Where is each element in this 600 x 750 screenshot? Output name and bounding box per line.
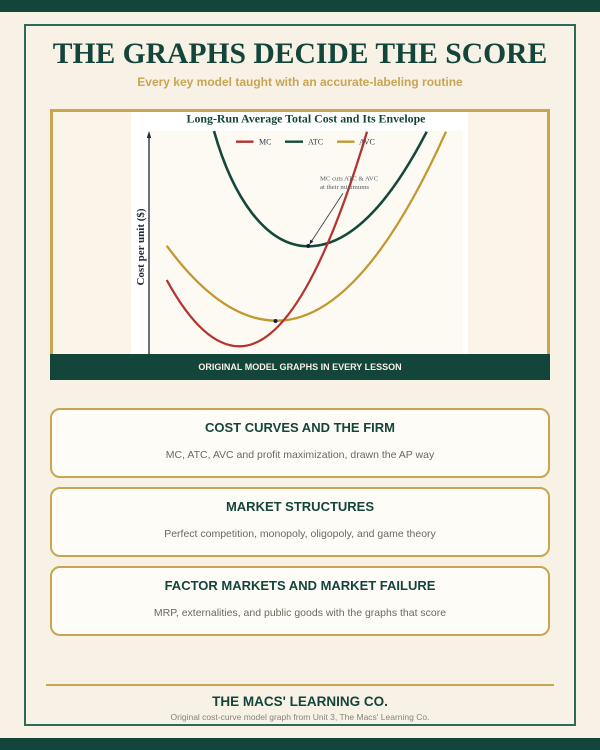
chart title: Long-Run Average Total Cost and Its Envelope <box>187 112 425 126</box>
curve: AVC <box>167 132 446 321</box>
panel: graph image <box>50 109 550 380</box>
annotation: at their minimums <box>320 184 369 191</box>
footer caption: Original cost-curve model graph from Unit 3, The Macs' Learning Co. <box>171 712 429 722</box>
banner <box>50 354 550 380</box>
curve: MC <box>167 132 367 346</box>
card: factor markets <box>50 566 550 636</box>
subtitle: Every key model taught with an accurate-labeling routine <box>137 75 463 89</box>
point: AVC minimum <box>274 319 278 323</box>
title: THE GRAPHS DECIDE THE SCORE <box>53 38 547 70</box>
bottom bar <box>0 738 600 750</box>
legend: MC <box>259 138 271 146</box>
annotation: MC cuts ATC & AVC <box>320 176 379 182</box>
card: cost curves <box>50 408 550 478</box>
card description: Perfect competition, monopoly, oligopoly, and game theory <box>164 528 436 540</box>
legend <box>236 138 375 146</box>
legend: ATC <box>308 138 323 146</box>
card: market structures <box>50 487 550 557</box>
footer divider <box>46 684 554 686</box>
top bar <box>0 0 600 12</box>
graph frame <box>50 109 550 359</box>
footer brand: THE MACS' LEARNING CO. <box>212 694 388 709</box>
card heading: MARKET STRUCTURES <box>226 499 374 514</box>
chart: cost curves <box>131 112 468 354</box>
curve: ATC <box>214 131 427 246</box>
banner: ORIGINAL MODEL GRAPHS IN EVERY LESSON <box>198 362 402 372</box>
card description: MRP, externalities, and public goods with the graphs that score <box>154 607 446 619</box>
point: ATC minimum <box>306 244 310 248</box>
legend: AVC <box>359 138 375 146</box>
card heading: COST CURVES AND THE FIRM <box>205 420 395 435</box>
card description: MC, ATC, AVC and profit maximization, drawn the AP way <box>166 449 434 461</box>
card heading: FACTOR MARKETS AND MARKET FAILURE <box>165 578 435 593</box>
annotation <box>310 176 379 244</box>
y axis label: Cost per unit ($) <box>135 208 147 286</box>
y axis <box>147 131 151 354</box>
